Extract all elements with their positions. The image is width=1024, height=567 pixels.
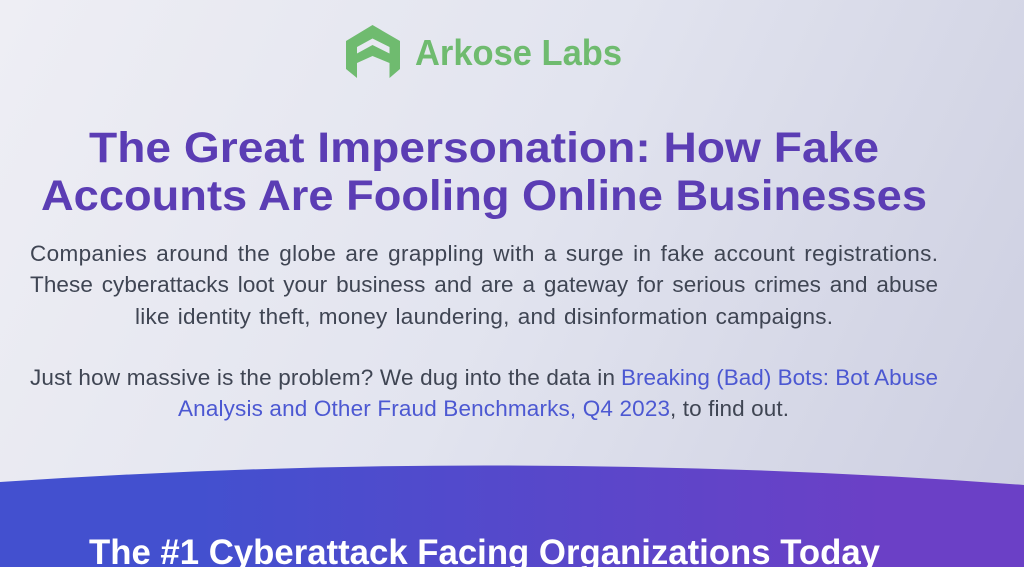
report paragraph with link: , to find out. <box>670 396 789 421</box>
report paragraph with link: Breaking (Bad) Bots: Bot Abuse <box>621 365 938 390</box>
title: The Great Impersonation: How Fake <box>89 124 879 172</box>
title <box>41 124 927 220</box>
gradient band <box>0 465 1024 567</box>
icon: Arkose Labs shield <box>346 25 400 78</box>
intro paragraph: These cyberattacks loot your business and are a gateway for serious crimes and abuse <box>30 272 938 297</box>
intro paragraph: like identity theft, money laundering, and disinformation campaigns. <box>135 304 833 329</box>
title: Accounts Are Fooling Online Businesses <box>41 172 927 220</box>
report paragraph with link: Analysis and Other Fraud Benchmarks, Q4 2023 <box>178 396 670 421</box>
logo <box>346 25 622 78</box>
intro paragraph <box>30 241 938 329</box>
intro paragraph: Companies around the globe are grappling with a surge in fake account registrations. <box>30 241 938 266</box>
report paragraph with link <box>30 365 938 421</box>
report paragraph with link: Just how massive is the problem? We dug into the data in <box>30 365 615 390</box>
logo wordmark: Arkose Labs <box>415 32 622 73</box>
